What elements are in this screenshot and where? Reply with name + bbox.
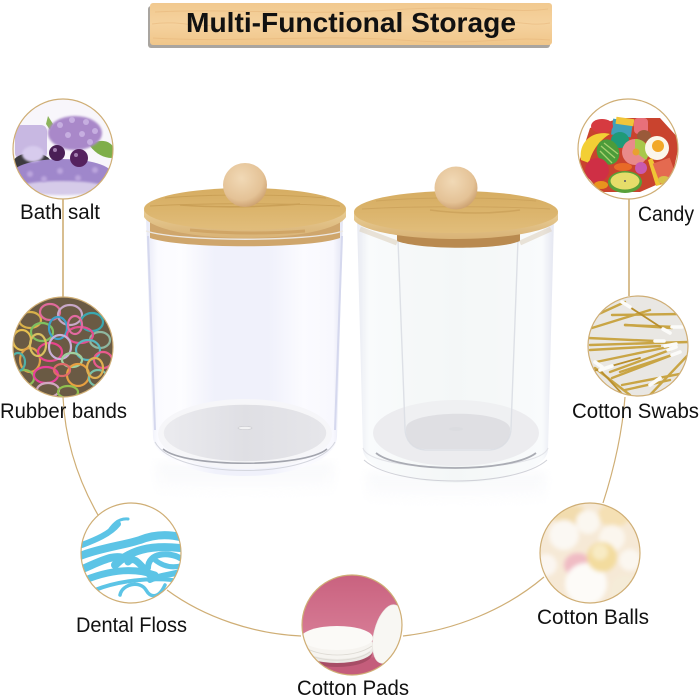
title banner (148, 3, 552, 48)
left jar lid underside (150, 222, 340, 246)
left jar lid (144, 188, 346, 238)
bubble: dental floss (80, 503, 184, 603)
label: cotton swabs: Cotton Swabs (572, 400, 699, 423)
label: rubber bands: Rubber bands (0, 400, 127, 423)
bubble: cotton balls (535, 503, 641, 605)
bubble: bath salt (12, 99, 114, 199)
right jar base (363, 400, 548, 481)
bubble: rubber bands (11, 297, 113, 398)
connector lines (63, 199, 629, 636)
label: bath salt: Bath salt (20, 201, 100, 224)
right jar inner tube (398, 240, 518, 450)
label: candy: Candy (638, 203, 694, 226)
left jar knob (223, 163, 267, 207)
left jar reflection (156, 462, 334, 498)
right jar (354, 166, 558, 506)
right jar lid (354, 191, 558, 239)
right jar reflection (366, 472, 546, 506)
right jar lid underside (397, 234, 520, 248)
bubble: cotton swabs (588, 296, 690, 398)
title text: Multi-Functional Storage (186, 7, 516, 38)
left jar base (155, 399, 335, 470)
left jar (144, 163, 346, 498)
right jar body (357, 218, 554, 483)
bubble: candy (578, 99, 680, 199)
bubble: cotton pads (300, 575, 409, 680)
right jar knob (434, 166, 478, 210)
label: dental floss: Dental Floss (76, 614, 187, 637)
label: cotton balls: Cotton Balls (537, 606, 649, 629)
label: cotton pads: Cotton Pads (297, 677, 409, 700)
left jar body (146, 215, 343, 476)
